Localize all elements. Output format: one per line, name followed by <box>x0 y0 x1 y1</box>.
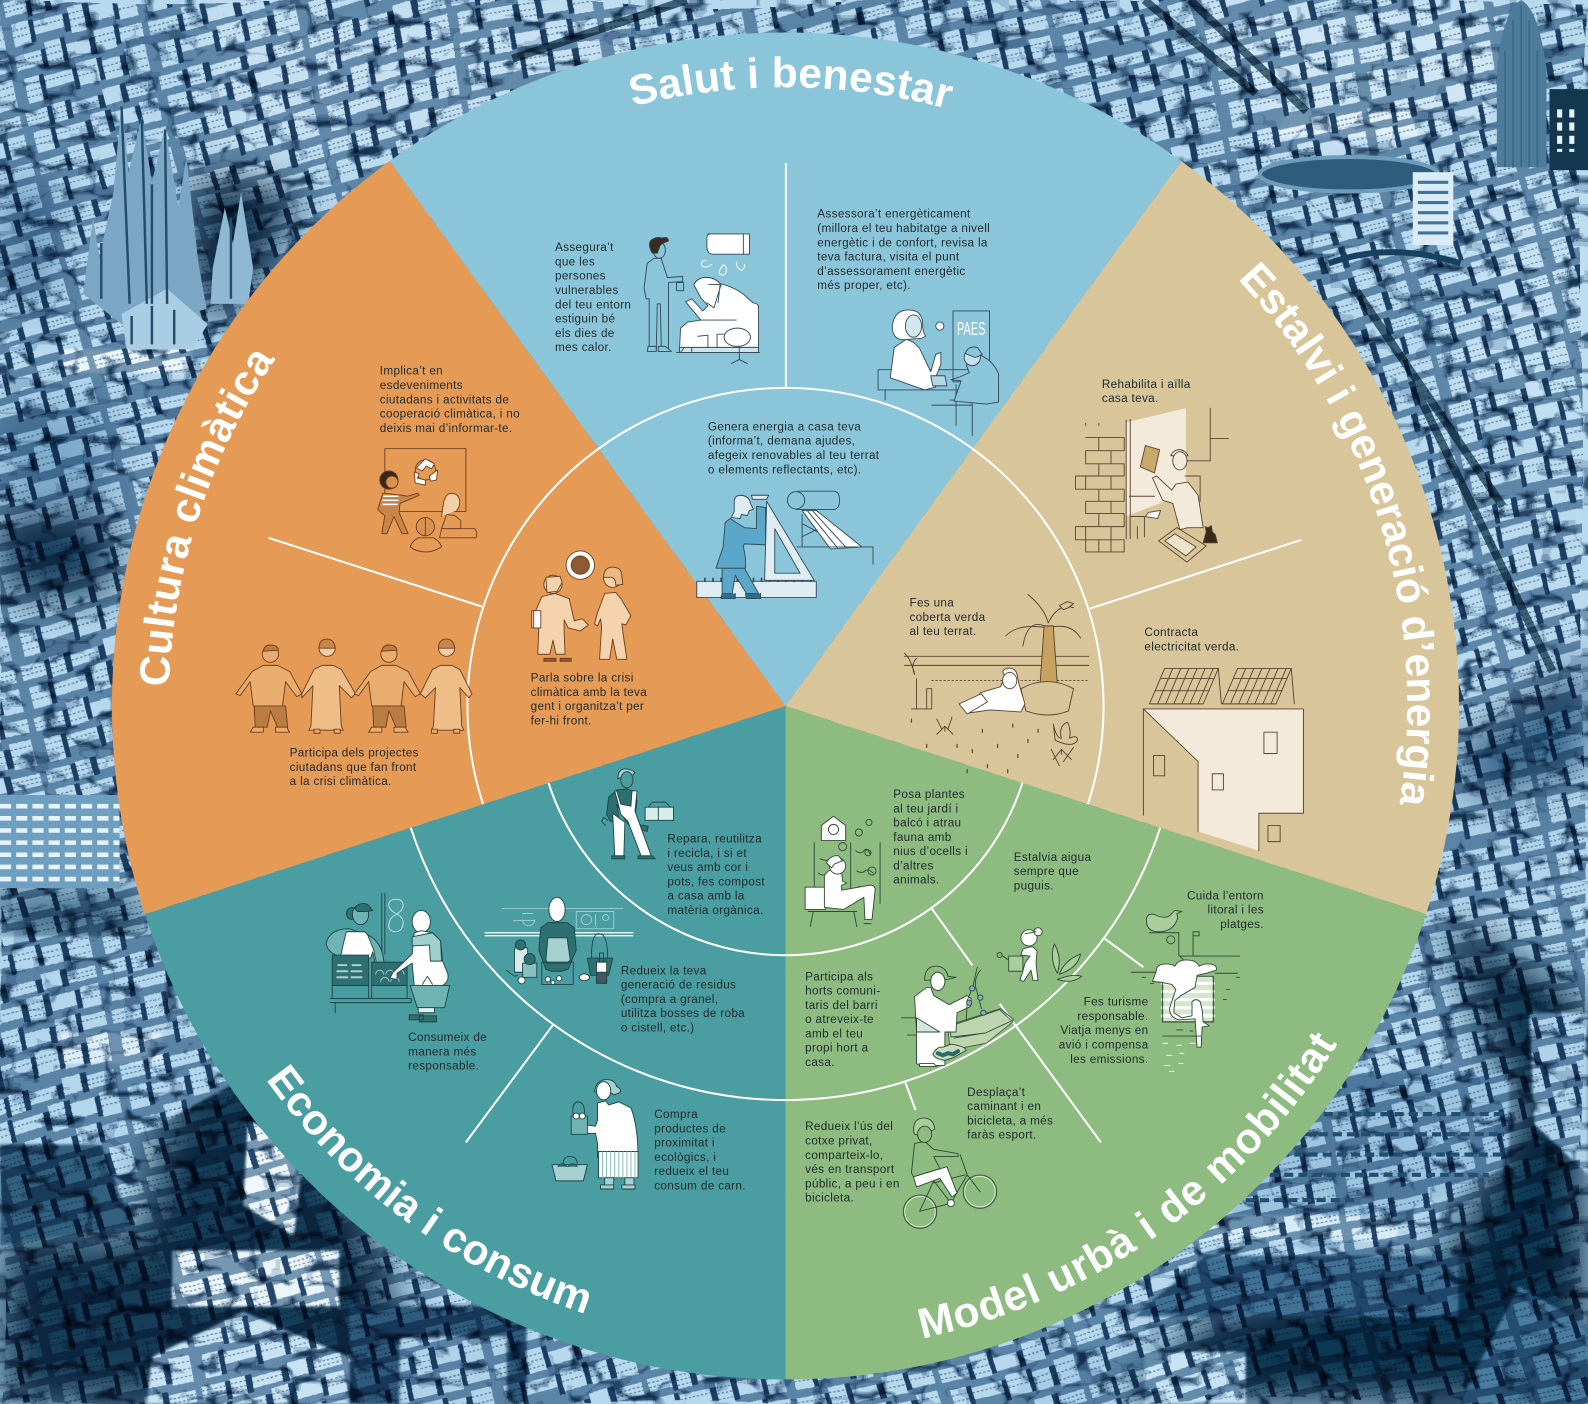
text: Rehabilita: casa teva. <box>1102 392 1159 405</box>
streets <box>512 0 1553 671</box>
heading: Model urbà i de mobilitat: Model urbà i de mobilitat <box>918 1032 1337 1338</box>
text: Redueix la teva: o cistell, etc.) <box>621 1021 694 1034</box>
text: Participa dels projectes: a la crisi climàtica. <box>290 775 392 788</box>
text: Genera energia: (informa’t, demana ajudes, <box>708 435 855 448</box>
striped slab building left <box>0 795 120 888</box>
text: Repara: pots, fes compost <box>667 875 765 888</box>
heading: Salut i benestar: Salut i benestar <box>630 56 954 108</box>
text: Compra productes: redueix el teu <box>654 1165 729 1178</box>
text: Implica't: esdeveniments <box>380 379 463 392</box>
text: Redueix l'ús: vés en transport <box>805 1163 895 1176</box>
text: Compra productes: productes de <box>654 1122 726 1135</box>
text: Desplaça't: caminant i en <box>967 1100 1041 1113</box>
text: Redueix l'ús: cotxe privat, <box>805 1135 873 1148</box>
text: Assegura't: persones <box>555 270 606 283</box>
text: Participa als horts: Participa als <box>805 970 873 983</box>
text: Fes una coberta verda: Fes una <box>909 597 954 610</box>
icon: sunbather on towel with whale and flag <box>1131 910 1240 1072</box>
text: Repara: matèria orgànica. <box>667 904 764 917</box>
text: Estalvia aigua: puguis. <box>1014 879 1054 892</box>
roundabout and bullring <box>1260 157 1460 263</box>
text: Contracta electricitat verda: Contracta <box>1144 626 1198 639</box>
text: Fes turisme: Viatja menys en <box>1060 1024 1148 1037</box>
icon: market stall with vendor and customer <box>326 893 450 1022</box>
text: Consumeix: manera més <box>408 1045 477 1058</box>
text: Repara: veus amb cor i <box>667 861 748 874</box>
text: Estalvia aigua: Estalvia aigua <box>1014 851 1092 864</box>
icon: solar panels on house <box>1143 668 1303 851</box>
icon: energy advice desk PAES <box>878 310 999 435</box>
Sagrada Familia <box>83 101 253 349</box>
panel: Cultura climàtica sector <box>112 161 785 914</box>
text: Assegura't: vulnerables <box>555 284 619 297</box>
heading: Estalvi i generació d'energia: Estalvi i generació d’energia <box>1240 261 1434 805</box>
panel: Economia i consum sector <box>145 706 785 1379</box>
text: Fes turisme: Fes turisme <box>1084 996 1148 1009</box>
icon: person on bench with birdhouse and plants <box>805 816 880 927</box>
text: Parla sobre la crisi: gent i organitza’t per <box>531 700 644 713</box>
text: Assegura't: Assegura’t <box>555 241 614 254</box>
text: Fes turisme: avió i compensa <box>1059 1039 1149 1052</box>
icon: children in front of recycling board <box>378 449 477 552</box>
text: Participa als horts: horts comuni- <box>805 985 880 998</box>
text: Redueix la teva: generació de residus <box>621 979 736 992</box>
text: Compra productes: ecològics, i <box>654 1151 716 1164</box>
icon: cyclist <box>903 1118 997 1228</box>
text: Posa plantes: nius d’ocells i <box>893 845 968 858</box>
text: Genera energia: Genera energia a casa teva <box>708 420 861 433</box>
text: Participa dels projectes: ciutadans que fan front <box>290 761 417 774</box>
Torre Agbar <box>1497 0 1588 170</box>
text: Consumeix: Consumeix de <box>408 1031 487 1044</box>
light building at lower right <box>1246 1114 1504 1200</box>
text: Assegura't: mes calor. <box>555 341 612 354</box>
text: Participa als horts: casa. <box>805 1056 835 1069</box>
text: Implica't: ciutadans i activitats de <box>380 393 509 406</box>
text: Posa plantes: al teu jardí i <box>893 802 958 815</box>
text: Repara: i recicla, i si et <box>667 847 747 860</box>
text: Rehabilita: Rehabilita i aïlla <box>1102 378 1191 391</box>
text: Implica't: cooperació climàtica, i no <box>380 408 520 421</box>
text: Repara: Repara, reutilitza <box>667 833 762 846</box>
icon: kitchen man reducing waste <box>485 897 633 984</box>
text: Parla sobre la crisi: fer-hi front. <box>531 714 592 727</box>
text: Parla sobre la crisi: climàtica amb la teva <box>531 686 647 699</box>
text: Compra productes: Compra <box>654 1108 698 1121</box>
text: Fes turisme: les emissions. <box>1070 1053 1148 1066</box>
text: Estalvia aigua: sempre que <box>1014 865 1079 878</box>
text: Fes una coberta verda: al teu terrat. <box>909 625 977 638</box>
text: Redueix l'ús: comparteix-lo, <box>805 1149 883 1162</box>
icon: two people talking about the planet <box>532 551 631 661</box>
text: Cuida l'entorn: Cuida l’entorn <box>1187 889 1264 902</box>
text: Posa plantes: d’altres <box>893 859 934 872</box>
text: Contracta electricitat verda: electricitat verda. <box>1144 640 1239 653</box>
text: Assessora't: energètic i de confort, revisa la <box>817 236 988 249</box>
icon: child with watering can and leaves <box>997 928 1082 981</box>
text: Genera energia: afegeix renovables al teu terrat <box>708 449 880 462</box>
panel: Salut i benestar sector <box>390 32 1181 706</box>
text: Participa als horts: taris del barri <box>805 999 878 1012</box>
text: Assessora't: d’assessorament energètic <box>817 265 966 278</box>
text: Desplaça't: bicicleta, a més <box>967 1114 1053 1127</box>
text: Compra productes: consum de carn. <box>654 1179 746 1192</box>
text: Redueix la teva: utilitza bosses de roba <box>621 1007 745 1020</box>
icon: repair man with toolbox <box>602 769 673 859</box>
text: Fes una coberta verda: coberta verda <box>909 611 986 624</box>
text: Cuida l'entorn: litoral i les <box>1208 904 1264 917</box>
text: Participa als horts: amb el teu <box>805 1027 863 1040</box>
text: Cuida l'entorn: platges. <box>1220 918 1264 931</box>
text: Participa als horts: o atreveix-te <box>805 1013 874 1026</box>
text: Compra productes: proximitat i <box>654 1137 715 1150</box>
text: Assessora't: Assessora’t energèticament <box>817 208 971 221</box>
text: Posa plantes: fauna amb <box>893 831 952 844</box>
text: Posa plantes: balcó i atrau <box>893 817 961 830</box>
text: Assegura't: els dies de <box>555 327 615 340</box>
text: Genera energia: o elements reflectants, etc). <box>708 463 861 476</box>
text: Implica't: deixis mai d’informar-te. <box>380 422 512 435</box>
text: Redueix la teva: (compra a granel, <box>621 993 718 1006</box>
text: Participa dels projectes: Participa dels projectes <box>290 747 419 760</box>
text: Posa plantes: animals. <box>893 874 940 887</box>
icon: gardener with raised planter <box>901 966 1014 1066</box>
icon: worker insulating a brick wall with a cat <box>1076 408 1228 562</box>
text: Desplaça't: faràs esport. <box>967 1129 1037 1142</box>
text: Assessora't: (millora el teu habitatge a nivell <box>817 222 990 235</box>
text: Repara: a casa amb la <box>667 890 745 903</box>
heading: Economia i consum: Economia i consum <box>267 1064 589 1314</box>
text: Redueix l'ús: bicicleta. <box>805 1192 854 1205</box>
text: Assegura't: del teu entorn <box>555 298 631 311</box>
text: Participa als horts: propi hort a <box>805 1042 869 1055</box>
icon: shopper with eggs and vegetable basket <box>552 1080 638 1189</box>
icon: man bringing water to elderly person under air conditioner <box>644 234 760 364</box>
text: Fes turisme: responsable. <box>1077 1010 1148 1023</box>
heading: Cultura climàtica: Cultura climàtica <box>140 352 276 684</box>
text: Redueix l'ús: públic, a peu i en <box>805 1177 900 1190</box>
panel: Model urbà i de mobilitat sector <box>785 706 1426 1379</box>
text: Assessora't: teva factura, visita el punt <box>817 251 960 264</box>
text: Parla sobre la crisi: Parla sobre la crisi <box>531 672 634 685</box>
icon: energy advice desk PAES: PAES <box>957 319 985 339</box>
icon: technician with set square and solar panel <box>697 491 873 599</box>
panel: Estalvi i generació d'energia sector <box>785 161 1459 914</box>
text: Assegura't: estiguin bé <box>555 313 615 326</box>
text: Implica't: Implica’t en <box>380 365 443 378</box>
text: Redueix la teva: Redueix la teva <box>621 964 707 977</box>
text: Consumeix: responsable. <box>408 1060 479 1073</box>
text: Posa plantes: Posa plantes <box>893 788 965 801</box>
text: Desplaça't: Desplaça’t <box>967 1086 1026 1099</box>
icon: person reading on green roof with palm <box>904 594 1089 773</box>
text: Redueix l'ús: Redueix l’ús del <box>805 1120 893 1133</box>
text: Assegura't: que les <box>555 255 595 268</box>
icon: four citizens holding hands <box>236 639 472 733</box>
text: Assessora't: més proper, etc). <box>817 279 911 292</box>
